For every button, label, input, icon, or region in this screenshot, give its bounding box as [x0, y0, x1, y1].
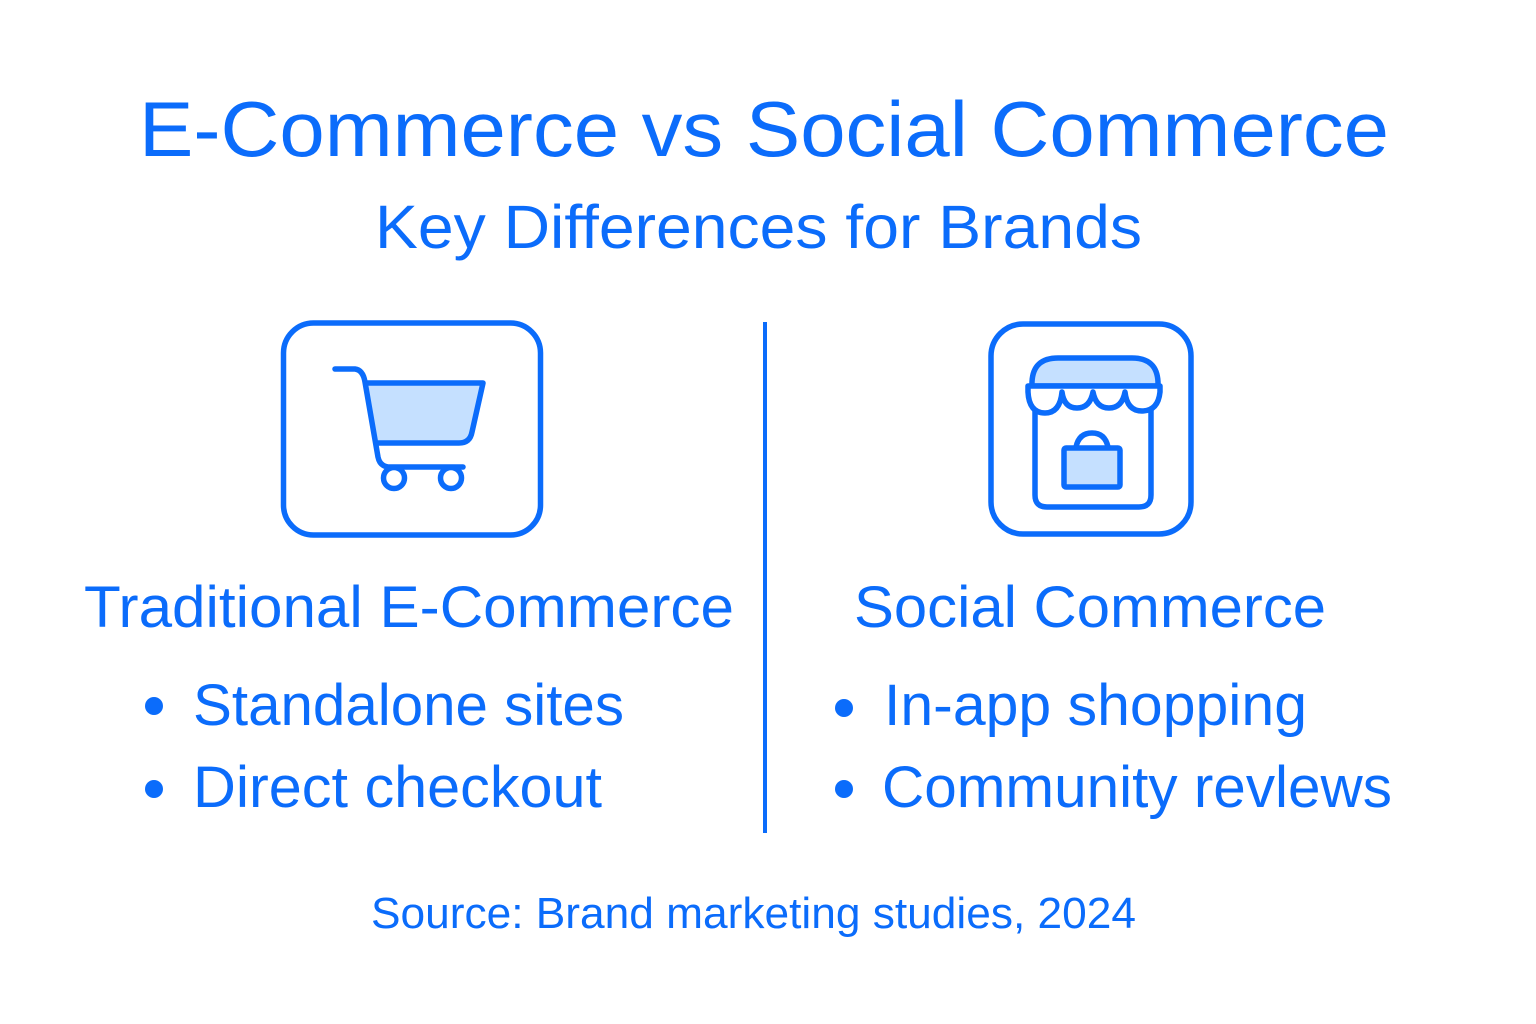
list: traditional e-commerce	[145, 673, 624, 820]
source note: Source: Brand marketing studies, 2024	[371, 889, 1136, 938]
title: E-Commerce vs Social Commerce	[139, 85, 1389, 173]
heading: traditional e-commerce: Traditional E-Commerce	[84, 575, 734, 640]
divider	[763, 322, 767, 833]
icon: shopping cart	[284, 323, 540, 535]
list: social commerce: In-app shopping	[884, 673, 1307, 738]
heading: social commerce: Social Commerce	[854, 575, 1326, 640]
subtitle: Key Differences for Brands	[375, 193, 1142, 261]
icon: storefront	[991, 324, 1191, 534]
list: social commerce: Community revlews	[882, 755, 1392, 820]
list: social commerce	[835, 673, 1392, 820]
list: traditional e-commerce: Standalone sites	[193, 673, 624, 738]
list: traditional e-commerce: Direct checkout	[193, 755, 602, 820]
